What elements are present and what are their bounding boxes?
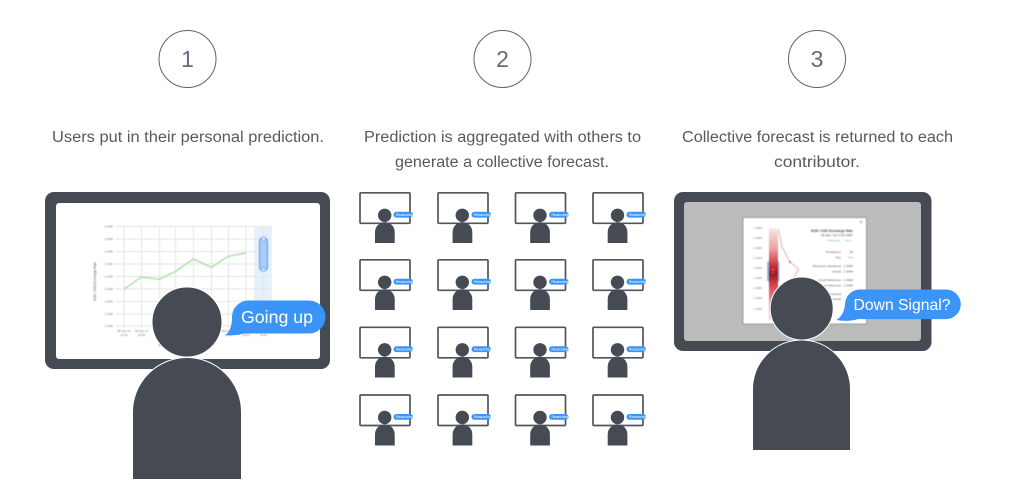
- contributor row 4: [360, 395, 646, 446]
- panel: grid of sixteen contributors: [360, 193, 646, 446]
- speech bubble: Going up: [226, 300, 326, 335]
- forecast popup: Yes: [848, 256, 853, 260]
- forecast popup: 1.3200: [753, 266, 762, 270]
- line chart with prediction handle: 1.3800: [104, 237, 113, 241]
- forecast popup: 40: [850, 250, 853, 254]
- forecast popup: 05 Nov '14 17:00 GMT: [821, 234, 853, 238]
- step 1 number: [159, 30, 216, 88]
- contributor row 4: Reasoning: [474, 415, 491, 419]
- contributor row 2: Reasoning: [552, 280, 568, 284]
- forecast popup: Actual: [832, 270, 841, 274]
- panel: collective forecast returned to user: [674, 192, 961, 450]
- forecast popup: Crowd Maximum: [818, 278, 841, 282]
- line chart with prediction handle: 08 Sep 14: [117, 329, 131, 333]
- speech bubble: Going up: Going up: [241, 307, 313, 327]
- forecast popup: 1.3000: [753, 276, 762, 280]
- step 2 caption: generate a collective forecast.: [395, 154, 609, 171]
- forecast popup: 1.2400: [753, 307, 762, 311]
- line chart with prediction handle: 09 Sep 14: [135, 329, 149, 333]
- contributor row 1: Reasoning: [474, 213, 491, 217]
- line chart with prediction handle: 1.2600: [104, 312, 113, 316]
- step 1 caption: Users put in their personal prediction.: [52, 129, 324, 146]
- speech bubble: Down Signal?: [836, 290, 961, 321]
- forecast popup: Lower Threshold: [818, 297, 841, 301]
- step 1 number: 1: [181, 46, 194, 72]
- forecast popup: 1.3044: [844, 270, 853, 274]
- forecast popup: 1.2600: [753, 296, 762, 300]
- contributor row 4: Reasoning: [396, 415, 413, 419]
- line chart with prediction handle: 1.3200: [104, 274, 113, 278]
- line chart with prediction handle: 14:00: [260, 333, 268, 337]
- contributor row 1: Reasoning: [552, 213, 568, 217]
- contributor row 3: Reasoning: [396, 348, 413, 352]
- step 2 caption: [364, 129, 641, 171]
- person: [752, 277, 850, 450]
- contributor row 4: Reasoning: [552, 415, 568, 419]
- step 2 number: 2: [496, 46, 509, 72]
- forecast popup: 1.3080: [844, 264, 853, 268]
- step 3 caption: Collective forecast is returned to each: [682, 129, 953, 146]
- step 3 number: [788, 30, 846, 88]
- line chart with prediction handle: 1.3000: [104, 287, 113, 291]
- forecast popup: Crowd Minimum: [819, 284, 841, 288]
- contributor row 4: Reasoning: [629, 415, 646, 419]
- contributor row 3: Reasoning: [552, 348, 568, 352]
- forecast popup: 1.2400: [844, 284, 853, 288]
- monitor: [674, 192, 932, 351]
- contributor row 1: Reasoning: [396, 213, 413, 217]
- line chart with prediction handle: 1.2400: [104, 324, 113, 328]
- forecast popup: ×: [860, 220, 863, 226]
- contributor row 2: Reasoning: [396, 280, 413, 284]
- line chart with prediction handle: 14:00: [225, 333, 233, 337]
- forecast popup: Pay: [836, 256, 841, 260]
- line chart with prediction handle: 1.4000: [104, 224, 113, 228]
- contributor row 3: [360, 327, 646, 378]
- forecast popup: 1.4000: [753, 226, 762, 230]
- forecast popup: 1.4000: [844, 278, 853, 282]
- forecast popup: Predictions: [826, 250, 841, 254]
- step 3 number: 3: [811, 46, 823, 72]
- line chart with prediction handle: 14:00: [138, 333, 146, 337]
- line chart with prediction handle: 1.2800: [104, 300, 113, 304]
- line chart with prediction handle: 14:00: [242, 333, 250, 337]
- forecast popup: Upper Threshold: [818, 292, 841, 296]
- contributor row 2: Reasoning: [474, 280, 491, 284]
- line chart with prediction handle: 08 Sep 14: [222, 329, 236, 333]
- contributor row 3: Reasoning: [474, 348, 491, 352]
- line chart with prediction handle: 14:00: [120, 333, 128, 337]
- line chart with prediction handle: [93, 224, 272, 346]
- forecast popup: [743, 218, 866, 324]
- step 3 caption: contributor.: [774, 154, 860, 171]
- step 2 number: [474, 30, 531, 88]
- person: [132, 287, 242, 480]
- line chart with prediction handle: 1.3600: [104, 250, 113, 254]
- forecast popup: 1.2800: [753, 286, 762, 290]
- forecast popup: 1.3600: [753, 246, 762, 250]
- contributor row 2: [360, 260, 646, 310]
- panel: user entering a prediction: [45, 192, 330, 480]
- step 2 caption: Prediction is aggregated with others to: [364, 129, 641, 146]
- forecast popup: 1.3800: [753, 236, 762, 240]
- forecast popup: 1.3400: [753, 256, 762, 260]
- contributor row 2: Reasoning: [629, 280, 646, 284]
- line chart with prediction handle: EUR / USD Exchange Rate: [93, 262, 97, 301]
- forecast popup: EUR / USD Exchange Rate: [811, 229, 853, 233]
- forecast popup: Next ›: [845, 238, 853, 242]
- step 3 caption: [682, 129, 953, 171]
- monitor: [45, 192, 330, 369]
- forecast popup: Maximum Likelihood: [813, 264, 841, 268]
- forecast popup: ‹ Previous: [826, 238, 840, 242]
- contributor row 1: Reasoning: [629, 213, 646, 217]
- contributor row 3: Reasoning: [629, 348, 646, 352]
- contributor row 1: [360, 193, 646, 243]
- line chart with prediction handle: 1.3400: [104, 262, 113, 266]
- speech bubble: Down Signal?: Down Signal?: [854, 297, 951, 314]
